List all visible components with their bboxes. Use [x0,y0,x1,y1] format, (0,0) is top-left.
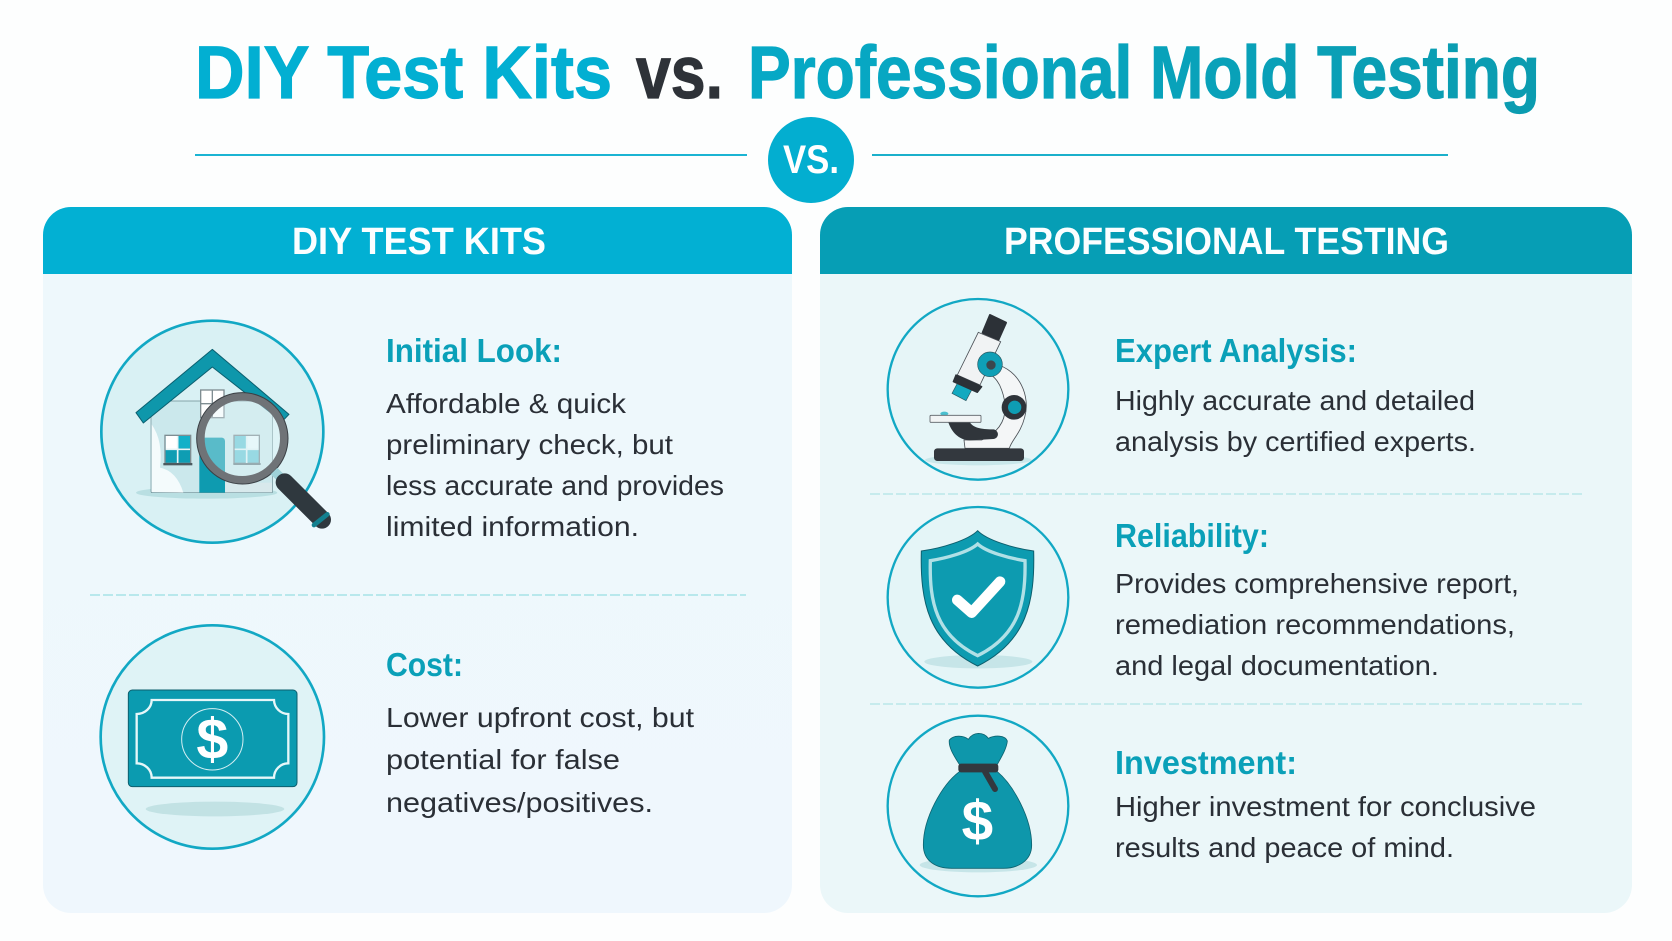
text block: Investment: Investment: [1115,744,1297,781]
text block: Initial Look [386,332,724,542]
panel header: DIY test kits: DIY TEST KITS [292,221,546,263]
text block: Expert Analysis: Highly accurate and detailed [1115,385,1475,416]
panel: DIY test kits [43,207,792,913]
panel header: DIY test kits [43,207,792,274]
text block: Investment: Higher investment for conclusive [1115,791,1536,822]
text block: Reliability [1115,517,1519,681]
text block: Expert Analysis: analysis by certified experts. [1115,426,1476,457]
text block: Investment: results and peace of mind. [1115,832,1454,863]
text block: Cost [386,646,694,818]
icon: house with magnifying glass [101,321,327,543]
icon: money bag: $ [962,790,993,853]
title: Professional Mold Testing [748,31,1540,114]
title: vs. [636,31,723,114]
text block: Initial Look: preliminary check, but [386,429,673,460]
text block: Cost: Cost: [386,646,463,683]
text block: Cost: negatives/positives. [386,787,653,818]
text block: Reliability: remediation recommendations, [1115,609,1515,640]
icon: dollar bill: $ [196,708,228,772]
text block: Cost: potential for false [386,744,620,775]
text block: Initial Look: limited information. [386,511,639,542]
text block: Reliability: and legal documentation. [1115,650,1439,681]
icon: microscope [888,299,1068,480]
text block: Expert Analysis: Expert Analysis: [1115,332,1357,369]
icon: shield with check [888,507,1068,688]
text block: Initial Look: Affordable & quick [386,388,627,419]
divider with VS badge: VS. [783,138,839,182]
panel header: professional testing [820,207,1632,274]
icon: dollar bill [101,625,324,849]
title: DIY Test Kits [195,31,612,114]
divider with VS badge [195,117,1448,203]
icon: money bag [888,716,1068,896]
text block: Expert Analysis [1115,332,1476,457]
text block: Cost: Lower upfront cost, but [386,702,694,733]
text block: Initial Look: less accurate and provides [386,470,724,501]
panel: professional testing [820,207,1632,913]
title [195,31,1540,114]
text block: Reliability: Reliability: [1115,517,1269,554]
text block: Investment [1115,744,1536,863]
panel header: professional testing: PROFESSIONAL TESTING [1004,221,1449,263]
text block: Reliability: Provides comprehensive report, [1115,568,1519,599]
text block: Initial Look: Initial Look: [386,332,562,369]
